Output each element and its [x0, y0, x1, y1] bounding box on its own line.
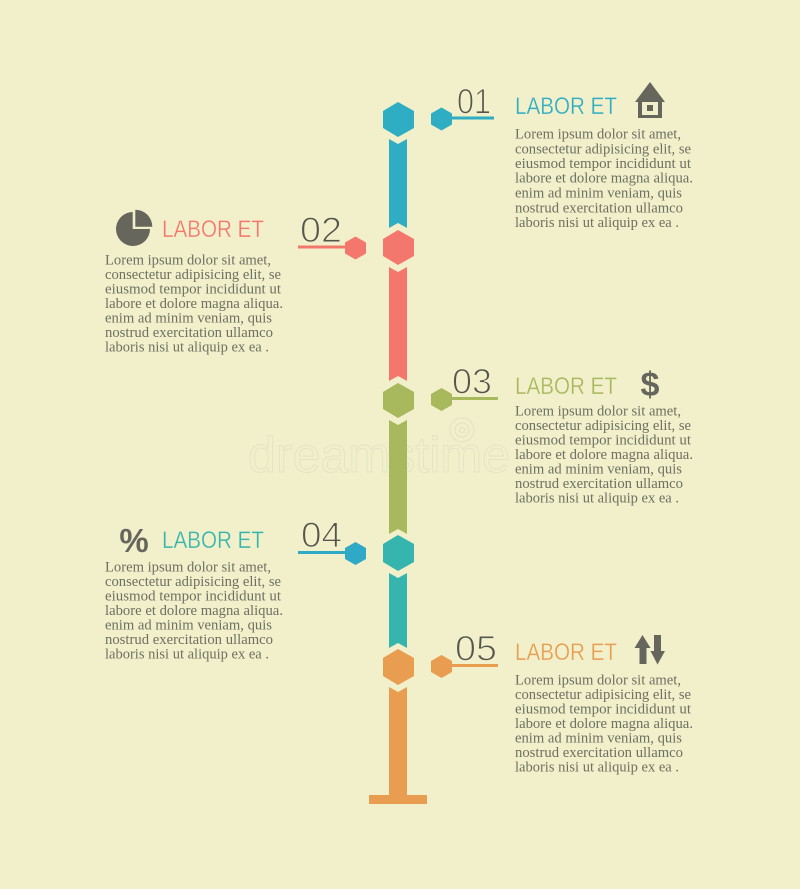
number 02: 02 [300, 210, 342, 250]
title 03: LABOR ET [515, 373, 617, 400]
connector 02 [298, 236, 366, 260]
large hexagon 1 [383, 102, 414, 137]
body text 01 [515, 126, 693, 231]
body text 02: consectetur adipisicing elit, se [105, 267, 281, 283]
body text 02: eiusmod tempor incididunt ut [105, 282, 281, 298]
body text 03: Lorem ipsum dolor sit amet, [515, 404, 681, 420]
body text 04: enim ad minim veniam, quis [105, 618, 272, 634]
title 02: LABOR ET [162, 216, 264, 243]
icon: up and down arrows [634, 635, 665, 664]
number 05: 05 [455, 628, 497, 668]
large hexagon 4 [383, 535, 414, 571]
step 05 [431, 628, 693, 776]
body text 05: consectetur adipisicing elit, se [515, 687, 691, 703]
step 02 [105, 210, 366, 356]
body text 01: eiusmod tempor incididunt ut [515, 156, 691, 172]
body text 03: labore et dolore magna aliqua. [515, 447, 693, 463]
body text 04: labore et dolore magna aliqua. [105, 603, 283, 619]
spine segment 4 [389, 573, 407, 648]
icon: pie chart [116, 210, 152, 246]
spine segment 5 with base [369, 687, 427, 804]
connector 04 [298, 542, 366, 565]
body text 05: labore et dolore magna aliqua. [515, 716, 693, 732]
body text 03: laboris nisi ut aliquip ex ea . [515, 490, 679, 506]
body text 04 [105, 560, 283, 662]
body text 05: Lorem ipsum dolor sit amet, [515, 672, 681, 688]
icon: house [635, 82, 665, 118]
body text 02: nostrud exercitation ullamco [105, 325, 273, 341]
body text 02: labore et dolore magna aliqua. [105, 296, 283, 312]
title 04: LABOR ET [162, 527, 264, 554]
title 01: LABOR ET [515, 93, 617, 120]
body text 04: eiusmod tempor incididunt ut [105, 588, 281, 604]
watermark: dreamstime [248, 427, 510, 483]
body text 04: Lorem ipsum dolor sit amet, [105, 560, 271, 576]
body text 04: laboris nisi ut aliquip ex ea . [105, 646, 269, 662]
body text 02: Lorem ipsum dolor sit amet, [105, 252, 271, 268]
body text 03 [515, 404, 693, 506]
spine segment 2 [389, 267, 407, 381]
icon: percent: % [119, 522, 149, 559]
connector 05 [431, 655, 498, 678]
large hexagon 2 [383, 230, 414, 265]
number 01: 01 [457, 82, 491, 122]
body text 04: nostrud exercitation ullamco [105, 632, 273, 648]
body text 05: eiusmod tempor incididunt ut [515, 702, 691, 718]
large hexagon 3 [383, 383, 414, 418]
step 03 [431, 362, 693, 506]
number 04: 04 [301, 515, 342, 555]
number 03: 03 [452, 362, 492, 402]
body text 01: Lorem ipsum dolor sit amet, [515, 126, 681, 142]
spine segment 1 [389, 139, 407, 228]
body text 05: nostrud exercitation ullamco [515, 745, 683, 761]
body text 02: enim ad minim veniam, quis [105, 310, 272, 326]
connector 03 [431, 388, 498, 411]
body text 02: laboris nisi ut aliquip ex ea . [105, 340, 269, 356]
title 05: LABOR ET [515, 639, 617, 666]
body text 05: laboris nisi ut aliquip ex ea . [515, 760, 679, 776]
body text 01: consectetur adipisicing elit, se [515, 142, 691, 158]
step 01 [431, 82, 693, 231]
timeline spine [369, 102, 427, 804]
body text 03: nostrud exercitation ullamco [515, 476, 683, 492]
body text 03: eiusmod tempor incididunt ut [515, 432, 691, 448]
body text 05: enim ad minim veniam, quis [515, 730, 682, 746]
body text 01: laboris nisi ut aliquip ex ea . [515, 215, 679, 231]
large hexagon 5 [383, 649, 414, 685]
body text 03: enim ad minim veniam, quis [515, 462, 682, 478]
body text 03: consectetur adipisicing elit, se [515, 418, 691, 434]
spine segment 3 [389, 420, 407, 534]
body text 05 [515, 672, 693, 776]
body text 01: enim ad minim veniam, quis [515, 186, 682, 202]
body text 02 [105, 252, 283, 356]
body text 01: nostrud exercitation ullamco [515, 200, 683, 216]
icon: dollar: $ [641, 366, 660, 404]
body text 04: consectetur adipisicing elit, se [105, 574, 281, 590]
step 04 [105, 515, 366, 662]
connector 01 [431, 108, 494, 130]
body text 01: labore et dolore magna aliqua. [515, 170, 693, 186]
